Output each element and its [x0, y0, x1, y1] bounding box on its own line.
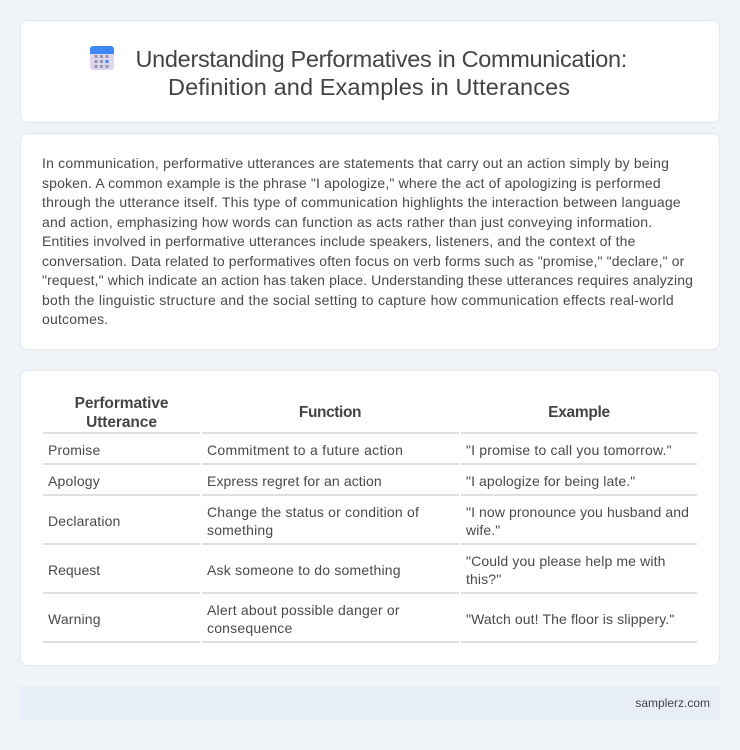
intro paragraph: [42, 155, 693, 327]
table: Ask someone to do something: [207, 562, 401, 578]
table: "I now pronounce you husband and: [466, 504, 689, 520]
panel: title card: [20, 20, 720, 123]
intro paragraph: "request," which indicate an action has taken place. Understanding these utterances requires analyzing: [42, 272, 693, 288]
table: Express regret for an action: [207, 473, 382, 489]
intro paragraph: both the linguistic structure and the social setting to capture how communication effects real-world: [42, 292, 674, 308]
row: apology: Apology: [48, 473, 100, 489]
intro paragraph: Entities involved in performative utterances include speakers, listeners, and the context of the: [42, 233, 636, 249]
header: function: Function: [299, 404, 361, 421]
icon: calendar: [90, 46, 114, 70]
row: request: Request: [48, 562, 100, 578]
header: performative utterance: Utterance: [86, 414, 157, 431]
footer text: samplerz.com: [635, 696, 710, 710]
table: wife.": [466, 522, 500, 538]
title: [136, 46, 627, 100]
table: "Watch out! The floor is slippery.": [466, 611, 674, 627]
row: declaration: Declaration: [48, 513, 120, 529]
row: warning: Warning: [48, 611, 101, 627]
intro paragraph: spoken. A common example is the phrase "I apologize," where the act of apologizing is performed: [42, 174, 661, 190]
table: Change the status or condition of: [207, 504, 419, 520]
panel: table card: [20, 370, 720, 666]
table: [43, 395, 697, 643]
table: consequence: [207, 620, 292, 636]
table: Commitment to a future action: [207, 442, 403, 458]
table: "Could you please help me with: [466, 553, 666, 569]
row: promise: Promise: [48, 442, 100, 458]
intro paragraph: conversation. Data related to performatives often focus on verb forms such as "promise," "declare," or: [42, 252, 684, 268]
header: example: Example: [548, 404, 610, 421]
header: performative utterance: Performative: [75, 395, 168, 412]
header: performative utterance: [75, 395, 168, 431]
table: something: [207, 522, 273, 538]
table: Alert about possible danger or: [207, 602, 400, 618]
footer bar: [20, 686, 720, 720]
table: "I promise to call you tomorrow.": [466, 442, 672, 458]
intro paragraph: through the utterance itself. This type of communication highlights the interaction between language: [42, 194, 681, 210]
panel: intro card: [20, 133, 720, 350]
intro paragraph: and action, emphasizing how words can function as acts rather than just conveying information.: [42, 214, 652, 230]
intro paragraph: outcomes.: [42, 311, 108, 327]
intro paragraph: In communication, performative utterances are statements that carry out an action simply by being: [42, 155, 669, 171]
table: "I apologize for being late.": [466, 473, 635, 489]
table: this?": [466, 571, 501, 587]
title: Understanding Performatives in Communication:: [136, 46, 627, 72]
title: Definition and Examples in Utterances: [168, 74, 570, 100]
